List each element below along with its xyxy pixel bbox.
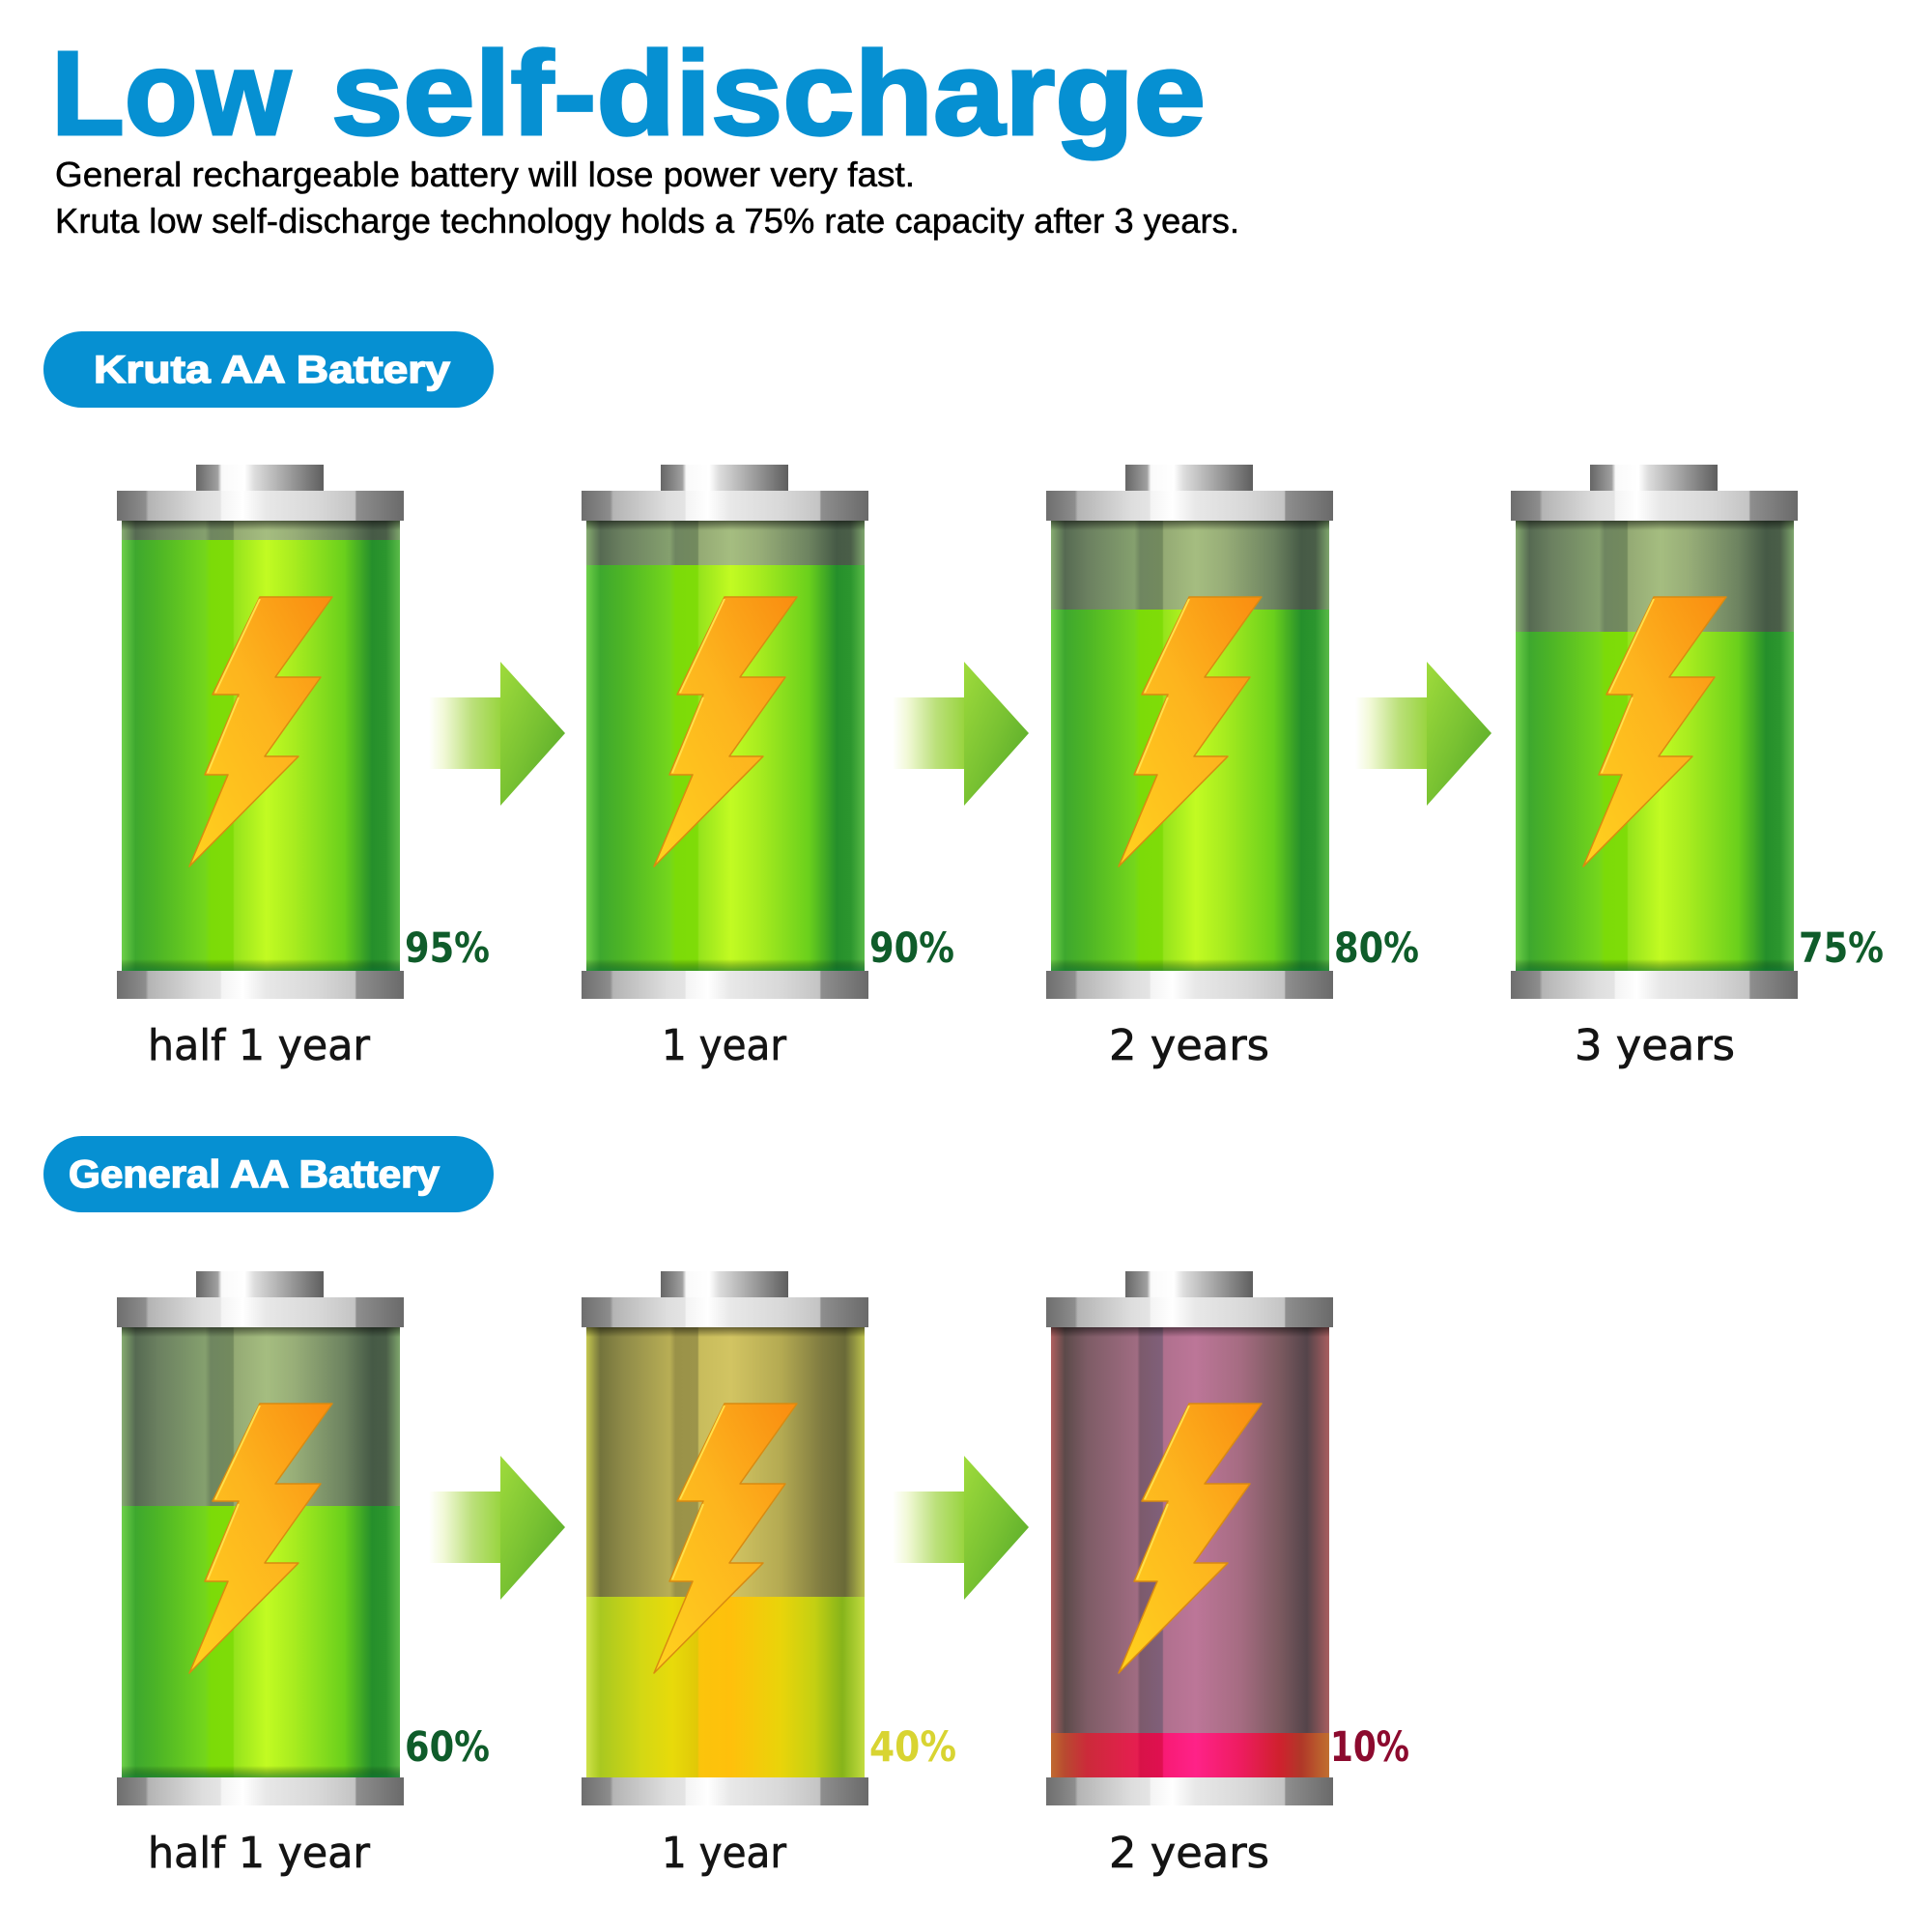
battery: General 2 years 10%: 10%	[1330, 1723, 1409, 1772]
title: Low	[51, 28, 291, 160]
arrow	[429, 1456, 565, 1600]
battery: General 2 years 10%	[1046, 1271, 1409, 1878]
battery: General half 1 year 60%	[117, 1271, 490, 1878]
battery: Kruta 2 years 80%: 2 years	[1109, 1021, 1269, 1070]
arrow	[1355, 662, 1492, 806]
battery: General 1 year 40%: 1 year	[662, 1829, 787, 1878]
battery: Kruta half 1 year 95%: 95%	[405, 924, 490, 973]
battery: Kruta 3 years 75%: 75%	[1799, 924, 1884, 973]
battery: General 1 year 40%	[582, 1271, 956, 1878]
battery: Kruta 1 year 90%: 90%	[869, 924, 954, 973]
battery: Kruta 3 years 75%	[1511, 465, 1884, 1070]
battery: Kruta 2 years 80%	[1046, 465, 1419, 1070]
arrow	[429, 662, 565, 806]
battery: Kruta half 1 year 95%	[117, 465, 490, 1070]
battery: Kruta 1 year 90%	[582, 465, 954, 1070]
battery: Kruta half 1 year 95%: half 1 year	[148, 1021, 371, 1070]
battery: General half 1 year 60%: 60%	[405, 1723, 490, 1772]
section label: Kruta AA Battery	[43, 331, 494, 408]
battery: Kruta 1 year 90%: 1 year	[662, 1021, 787, 1070]
arrow	[893, 662, 1029, 806]
battery: Kruta 2 years 80%: 80%	[1334, 924, 1419, 973]
intro text	[55, 155, 1239, 241]
battery: Kruta 3 years 75%: 3 years	[1575, 1021, 1735, 1070]
title: self-discharge	[331, 28, 1206, 160]
battery: General half 1 year 60%: half 1 year	[148, 1829, 371, 1878]
section label: Kruta AA Battery: Kruta AA Battery	[94, 349, 451, 391]
battery: General 1 year 40%: 40%	[869, 1723, 956, 1772]
intro text: Kruta low self-discharge technology holds a 75% rate capacity after 3 years.	[55, 201, 1239, 241]
battery: General 2 years 10%: 2 years	[1109, 1829, 1269, 1878]
intro text: General rechargeable battery will lose power very fast.	[55, 155, 915, 194]
arrow	[893, 1456, 1029, 1600]
section label: General AA Battery: General AA Battery	[69, 1153, 440, 1196]
section label: General AA Battery	[43, 1136, 494, 1212]
